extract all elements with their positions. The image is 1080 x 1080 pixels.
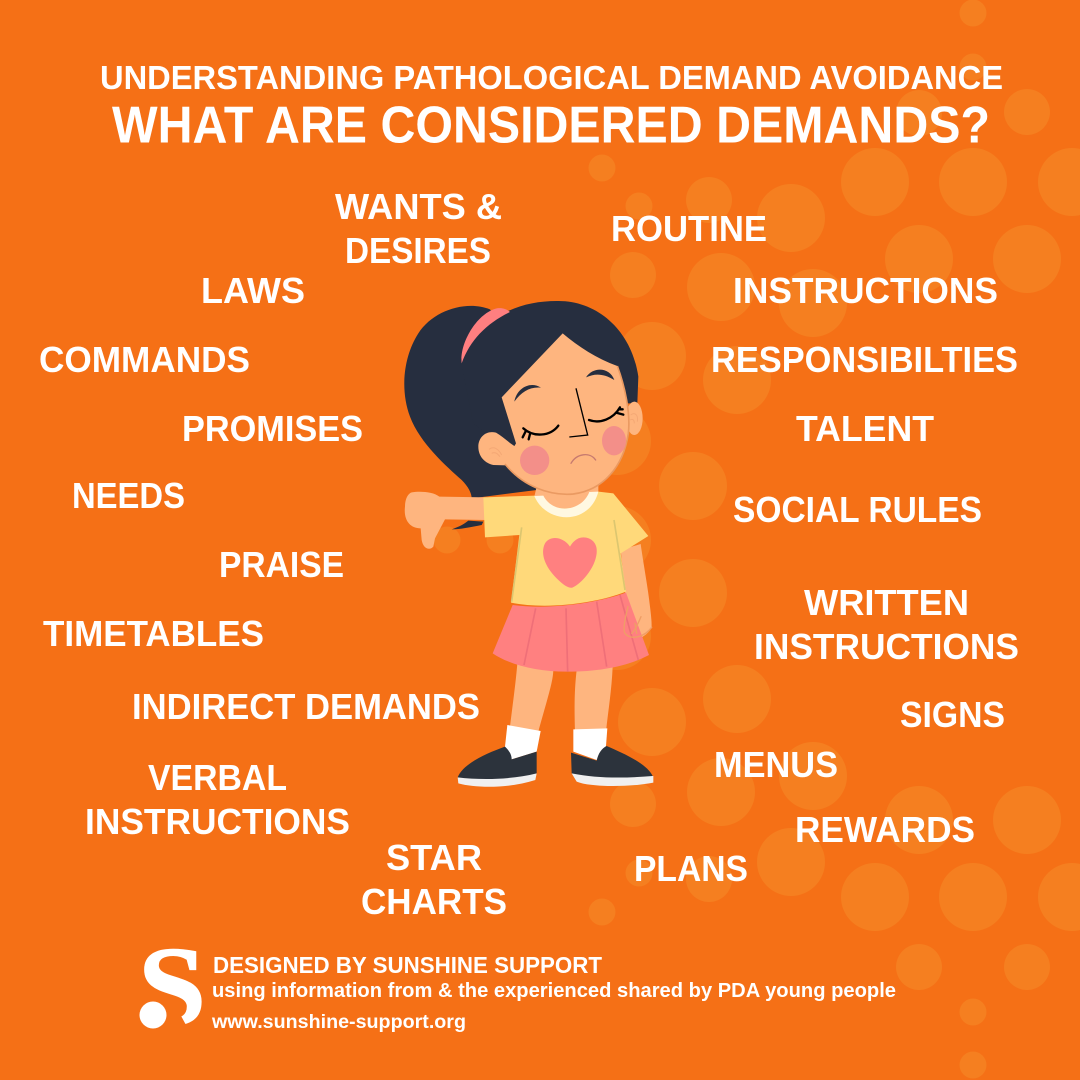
right leg bbox=[575, 667, 613, 732]
neck bbox=[534, 485, 598, 517]
left eyebrow bbox=[514, 385, 541, 402]
head hair bbox=[462, 301, 638, 450]
nose bbox=[569, 388, 588, 437]
main heading: WHAT ARE CONSIDERED DEMANDS? bbox=[112, 96, 990, 154]
word: verbal instructions: INSTRUCTIONS bbox=[85, 801, 350, 842]
illustration: girl giving thumbs down bbox=[404, 301, 653, 787]
website: www.sunshine-support.org bbox=[211, 1012, 466, 1033]
word: menus: MENUS bbox=[714, 744, 838, 785]
word: needs: NEEDS bbox=[72, 475, 185, 516]
word: commands: COMMANDS bbox=[39, 339, 250, 380]
skirt pleats bbox=[524, 595, 638, 672]
word: wants and desires: WANTS & bbox=[335, 186, 502, 227]
word: indirect demands: INDIRECT DEMANDS bbox=[132, 686, 480, 727]
face bbox=[502, 333, 629, 494]
word: verbal instructions bbox=[85, 757, 350, 842]
word: routine: ROUTINE bbox=[611, 208, 767, 249]
mouth bbox=[571, 455, 596, 463]
right cheek bbox=[602, 426, 626, 455]
word: star charts bbox=[361, 837, 507, 922]
word: written instructions: INSTRUCTIONS bbox=[754, 626, 1019, 667]
left ear bbox=[478, 432, 517, 465]
heart bbox=[543, 537, 597, 588]
word cloud: right side bbox=[611, 208, 1019, 889]
collar bbox=[534, 492, 598, 517]
jaw shadow bbox=[505, 366, 629, 494]
right arm bbox=[621, 544, 652, 640]
right eyebrow bbox=[586, 370, 614, 380]
word cloud: left side bbox=[39, 186, 507, 922]
word: praise: PRAISE bbox=[219, 544, 344, 585]
right sock bbox=[573, 728, 607, 760]
word: verbal instructions: VERBAL bbox=[148, 757, 287, 798]
left shoe bbox=[458, 747, 537, 779]
hair band bbox=[461, 308, 510, 363]
left shoe sole bbox=[458, 773, 537, 787]
ponytail bbox=[404, 306, 557, 498]
closed left eye bbox=[523, 426, 558, 439]
footer credits bbox=[211, 952, 896, 1033]
closed right eye bbox=[589, 407, 623, 421]
right shoe sole bbox=[572, 773, 653, 786]
word: social rules: SOCIAL RULES bbox=[733, 489, 982, 530]
shirt folds bbox=[512, 520, 625, 602]
left cheek bbox=[520, 446, 549, 475]
shirt bbox=[483, 492, 648, 606]
word: wants and desires bbox=[335, 186, 502, 271]
word: plans: PLANS bbox=[634, 848, 748, 889]
word: promises: PROMISES bbox=[182, 408, 363, 449]
word: timetables: TIMETABLES bbox=[43, 613, 264, 654]
word: instructions: INSTRUCTIONS bbox=[733, 270, 998, 311]
right ear bbox=[626, 402, 643, 435]
word: rewards: REWARDS bbox=[795, 809, 975, 850]
hair tip under arm bbox=[452, 521, 483, 529]
credit line: using information from & the experienced shared by PDA young people bbox=[212, 980, 896, 1002]
icon: sunshine support logo: S bbox=[138, 925, 206, 1049]
word: signs: SIGNS bbox=[900, 694, 1005, 735]
word: laws: LAWS bbox=[201, 270, 305, 311]
right shoe bbox=[571, 746, 653, 778]
pointing arm and hand bbox=[405, 492, 487, 549]
hand fingers bbox=[624, 607, 652, 637]
subtitle: UNDERSTANDING PATHOLOGICAL DEMAND AVOIDANCE bbox=[100, 60, 1003, 97]
word: wants and desires: DESIRES bbox=[345, 230, 491, 271]
title block bbox=[100, 60, 1003, 154]
word: written instructions bbox=[754, 582, 1019, 667]
skirt bbox=[493, 593, 649, 672]
left sock bbox=[505, 725, 541, 759]
credit heading: DESIGNED BY SUNSHINE SUPPORT bbox=[213, 952, 603, 978]
left leg bbox=[510, 663, 553, 732]
word: talent: TALENT bbox=[796, 408, 934, 449]
word: star charts: STAR bbox=[386, 837, 482, 878]
word: responsibilties: RESPONSIBILTIES bbox=[711, 339, 1018, 380]
word: star charts: CHARTS bbox=[361, 881, 507, 922]
word: written instructions: WRITTEN bbox=[804, 582, 969, 623]
